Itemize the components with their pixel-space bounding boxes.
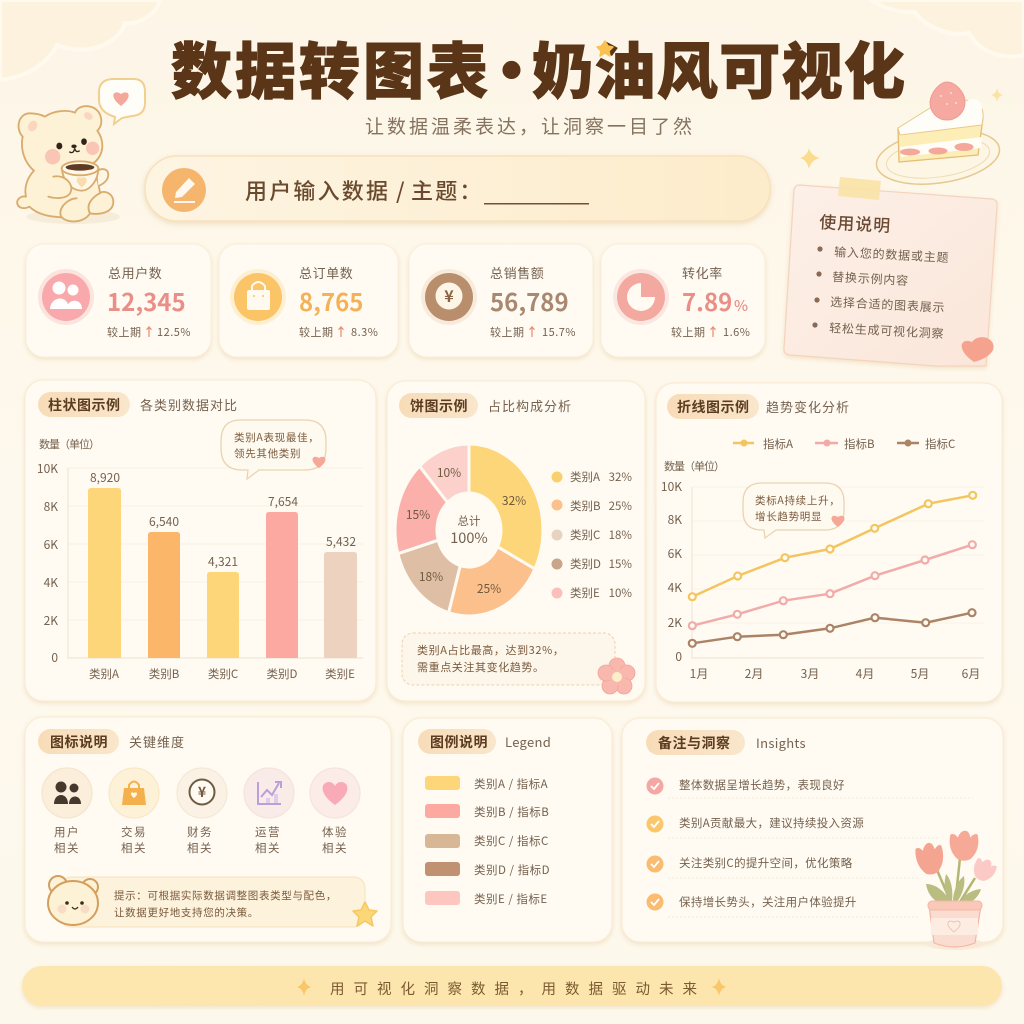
y axis labels: 2K <box>44 612 58 629</box>
panel: insights <box>622 718 1003 942</box>
value: 7.89 <box>682 283 732 318</box>
icon: right sparkle <box>712 978 726 996</box>
y axis labels: 8K <box>44 498 58 515</box>
donut centre: 总计 <box>458 513 481 529</box>
pie legend: 18% <box>609 527 632 543</box>
callout: 类别A表现最佳， <box>234 430 319 445</box>
x axis labels: 1月 <box>690 665 708 682</box>
delta: ↑ <box>526 323 538 340</box>
icon: pie <box>613 269 669 325</box>
icon: yen coin: ¥ <box>444 283 454 307</box>
swatch rows: 类别C / 指标C <box>474 833 549 849</box>
tip box: 提示：可根据实际数据调整图表类型与配色， <box>114 888 337 903</box>
x axis labels: 3月 <box>801 665 819 682</box>
panel: icon key <box>25 717 391 942</box>
pie legend: 类别A <box>570 469 600 485</box>
donut labels: 18% <box>419 568 443 585</box>
stat card: sales <box>409 244 593 357</box>
heading subtitle: 趋势变化分析 <box>766 397 850 416</box>
note list: 输入您的数据或主题 <box>834 243 950 266</box>
stat card: users <box>26 244 211 357</box>
icon labels: 用户 <box>54 824 80 840</box>
y axis labels <box>37 460 58 666</box>
line legend: 指标A <box>763 436 793 452</box>
delta <box>490 323 576 340</box>
icon: flower <box>598 658 635 694</box>
y axis labels: 2K <box>668 614 682 631</box>
swatch rows: 类别A / 指标A <box>474 776 548 792</box>
pie legend: 类别B <box>570 498 601 514</box>
delta <box>107 323 191 340</box>
note list <box>812 243 950 342</box>
line legend: 指标C <box>925 436 955 452</box>
axis title: 数量（单位） <box>664 458 724 474</box>
delta: 较上期 <box>107 324 142 340</box>
bar values: 7,654 <box>268 493 298 510</box>
delta <box>671 323 750 340</box>
y axis labels: 6K <box>668 545 682 562</box>
insight 3: 关注类别C的提升空间，优化策略 <box>679 855 853 871</box>
icon: pencil <box>162 168 206 212</box>
x axis labels: 2月 <box>745 665 763 682</box>
icon labels <box>54 824 348 856</box>
delta: 较上期 <box>671 324 706 340</box>
icon labels: 交易 <box>121 824 147 840</box>
insight 3 <box>646 855 920 878</box>
input label: 主题： <box>411 174 484 206</box>
pie note: 需重点关注其变化趋势。 <box>417 659 545 675</box>
y axis labels: 10K <box>37 460 58 477</box>
icon: star <box>353 902 377 926</box>
icon: yen <box>177 768 227 818</box>
icon labels: 体验 <box>322 824 348 840</box>
value: 12,345 <box>107 283 186 318</box>
panel: pie chart <box>387 381 645 701</box>
donut centre <box>450 513 488 548</box>
delta <box>299 323 378 340</box>
label: 总销售额 <box>490 263 544 282</box>
y axis labels: 4K <box>668 579 682 596</box>
series B <box>689 541 976 629</box>
panel: legend <box>403 718 612 942</box>
heading tag: 柱状图示例 <box>48 395 120 415</box>
input label: 用户输入数据 <box>245 174 390 206</box>
title: 数据转图表 <box>171 22 491 111</box>
value: 56,789 <box>490 283 569 318</box>
heading tag <box>38 392 130 417</box>
pie legend: 10% <box>609 585 632 601</box>
donut centre: 100% <box>450 527 488 548</box>
x axis labels <box>690 665 980 682</box>
x axis labels: 4月 <box>856 665 874 682</box>
x axis labels: 类别B <box>149 666 180 682</box>
stat card: orders <box>219 244 398 357</box>
bar values: 6,540 <box>149 513 179 530</box>
label: 总用户数 <box>108 263 162 282</box>
delta: ↑ <box>335 323 347 340</box>
heading tag <box>399 393 478 418</box>
footer banner <box>22 966 1002 1006</box>
delta: 8.3% <box>351 324 378 340</box>
callout: 类标A持续上升， <box>755 493 840 508</box>
heading subtitle: 占比构成分析 <box>488 396 572 415</box>
delta: 12.5% <box>157 324 191 340</box>
icon: bag <box>109 768 159 818</box>
heading subtitle: Legend <box>505 732 551 751</box>
donut labels: 25% <box>477 580 501 597</box>
cloud: top left <box>0 0 160 80</box>
pie legend: 类别E <box>570 585 600 601</box>
heading tag: 图例说明 <box>430 732 488 752</box>
pie legend: 类别D <box>570 556 601 572</box>
title: · <box>481 22 542 111</box>
subtitle: 让数据温柔表达，让洞察一目了然 <box>365 112 695 139</box>
icon: users <box>38 269 94 325</box>
insight 1: 整体数据呈增长趋势，表现良好 <box>679 777 845 793</box>
axis title: 数量（单位） <box>39 436 99 452</box>
icon labels: 相关 <box>255 840 281 856</box>
heading subtitle: Insights <box>756 733 806 752</box>
footer text: 用可视化洞察数据，用数据驱动未来 <box>330 978 706 999</box>
icon: title star <box>597 41 613 56</box>
icon: bear head <box>48 876 98 925</box>
icon labels: 相关 <box>121 840 147 856</box>
pie legend <box>552 469 632 601</box>
bar values <box>90 469 356 570</box>
heading tag <box>646 730 745 755</box>
y axis labels: 8K <box>668 511 682 528</box>
donut labels: 32% <box>502 492 526 509</box>
donut labels: 15% <box>406 506 430 523</box>
heading tag: 饼图示例 <box>410 396 468 416</box>
bar values: 8,920 <box>90 469 120 486</box>
heading subtitle: 各类别数据对比 <box>140 395 238 414</box>
bar values: 5,432 <box>326 533 356 550</box>
note heading: 使用说明 <box>819 208 892 237</box>
callout: 增长趋势明显 <box>755 509 822 524</box>
heading tag: 图标说明 <box>50 732 108 752</box>
note list: 替换示例内容 <box>832 268 909 289</box>
y axis labels: 10K <box>661 478 682 495</box>
line legend <box>733 436 955 452</box>
swatch rows: 类别E / 指标E <box>474 891 548 907</box>
insight 2 <box>646 815 940 838</box>
y axis labels: 0 <box>675 648 682 665</box>
note list: 轻松生成可视化洞察 <box>829 319 945 342</box>
x axis labels: 类别C <box>208 666 238 682</box>
value: % <box>734 295 748 316</box>
callout <box>743 483 845 538</box>
bars <box>88 488 357 658</box>
icon: bag <box>230 269 286 325</box>
delta: 较上期 <box>490 324 524 340</box>
pie legend: 类别C <box>570 527 600 543</box>
value: 8,765 <box>299 283 363 318</box>
icon labels: 相关 <box>322 840 348 856</box>
title: 奶油风可视化 <box>532 22 906 111</box>
panel: bar chart <box>25 380 376 701</box>
sticky note: usage <box>784 177 997 366</box>
heading subtitle: 关键维度 <box>129 732 185 751</box>
pie legend: 32% <box>609 469 632 485</box>
input label: / <box>396 174 407 206</box>
y axis labels: 0 <box>51 649 58 666</box>
icon: cake <box>873 82 1003 191</box>
heading tag <box>38 729 119 754</box>
pie note: 类别A占比最高，达到32%， <box>417 642 564 658</box>
pie legend: 25% <box>609 498 632 514</box>
pie note <box>402 633 615 685</box>
donut labels <box>406 464 526 597</box>
series C <box>689 609 976 647</box>
note list: 选择合适的图表展示 <box>830 293 946 316</box>
series A <box>689 492 976 600</box>
label: 转化率 <box>682 263 723 282</box>
pie legend: 15% <box>609 556 632 572</box>
delta: 较上期 <box>299 324 334 340</box>
tip box <box>60 877 365 927</box>
donut labels: 10% <box>437 464 461 481</box>
icon labels: 相关 <box>54 840 80 856</box>
delta: ↑ <box>707 323 719 340</box>
icon: left sparkle <box>297 978 311 996</box>
line legend: 指标B <box>844 436 875 452</box>
input underline <box>484 203 589 204</box>
icon labels: 相关 <box>187 840 213 856</box>
icon: sparkle right of cake <box>991 88 1003 102</box>
icon: bear with coffee <box>17 106 120 224</box>
insight 1 <box>646 777 973 798</box>
icon: yen coin <box>421 269 477 325</box>
icon: yen: ¥ <box>198 782 207 802</box>
x axis labels <box>89 666 355 682</box>
x axis labels: 5月 <box>911 665 929 682</box>
input bar <box>145 156 770 221</box>
swatch rows <box>425 776 550 907</box>
stat card: conversion <box>601 244 765 357</box>
icon: sparkle left of note <box>800 148 820 169</box>
icon labels: 财务 <box>187 824 213 840</box>
icon: note heart <box>962 337 994 362</box>
swatch rows: 类别D / 指标D <box>474 862 550 878</box>
icon: tulip pot <box>914 831 999 950</box>
callout: 领先其他类别 <box>234 446 301 461</box>
x axis labels: 6月 <box>962 665 980 682</box>
icon: chart <box>244 768 294 818</box>
insight 4: 保持增长势头，关注用户体验提升 <box>679 894 857 910</box>
delta: ↑ <box>143 323 155 340</box>
tape <box>838 177 881 200</box>
x axis labels: 类别D <box>267 666 298 682</box>
donut chart <box>395 444 543 616</box>
y axis labels <box>661 478 682 665</box>
insight 4 <box>646 894 920 917</box>
x axis labels: 类别A <box>89 666 119 682</box>
heading tag: 折线图示例 <box>677 397 750 417</box>
heading tag <box>418 729 496 754</box>
cloud: top right <box>872 0 1024 56</box>
icon: heart <box>310 768 360 818</box>
y axis labels: 4K <box>44 574 58 591</box>
icon: speech bubble with heart <box>99 79 145 124</box>
icon: users <box>42 768 92 818</box>
heading tag <box>667 394 759 419</box>
delta: 15.7% <box>542 324 576 340</box>
label: 总订单数 <box>299 263 353 282</box>
x axis labels: 类别E <box>325 666 355 682</box>
swatch rows: 类别B / 指标B <box>474 804 549 820</box>
tip box: 让数据更好地支持您的决策。 <box>114 905 259 920</box>
panel: line chart <box>656 383 1002 702</box>
y axis labels: 6K <box>44 536 58 553</box>
icon labels: 运营 <box>255 824 281 840</box>
bar values: 4,321 <box>208 553 238 570</box>
heading tag: 备注与洞察 <box>658 733 730 753</box>
callout <box>221 420 326 479</box>
delta: 1.6% <box>723 324 750 340</box>
insight 2: 类别A贡献最大，建议持续投入资源 <box>679 815 864 831</box>
